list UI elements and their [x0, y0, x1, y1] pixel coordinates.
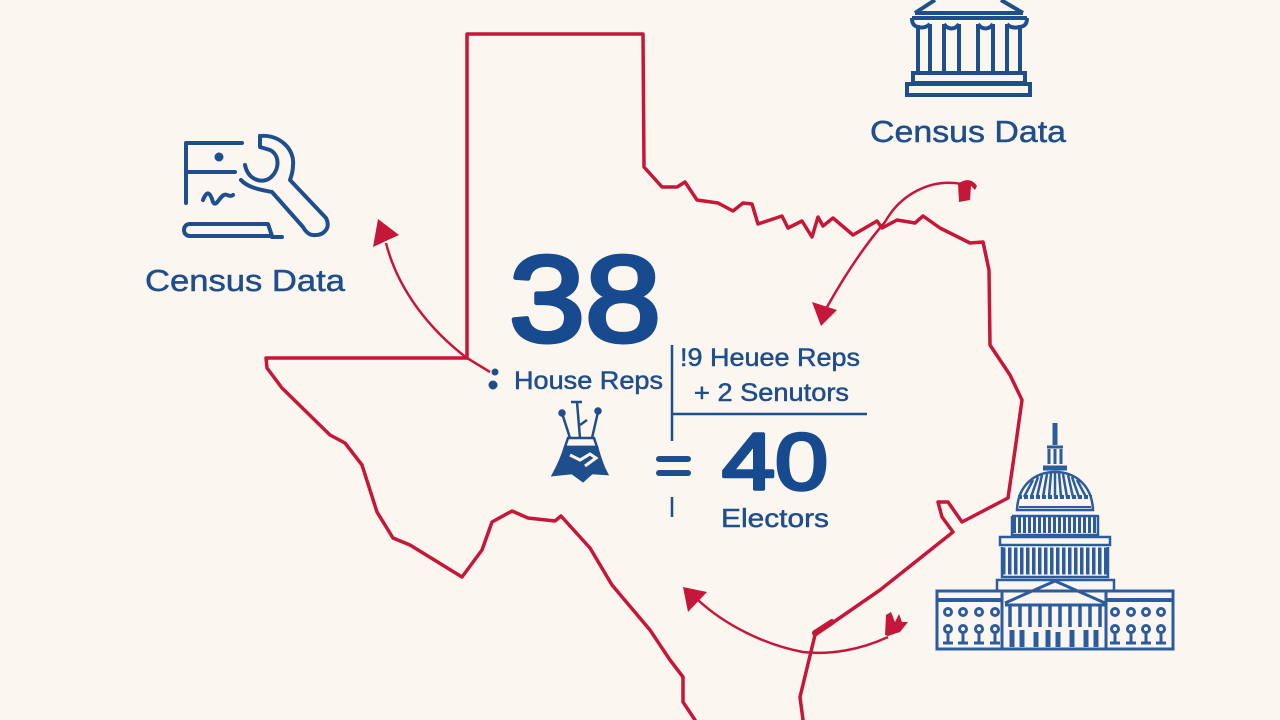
arrow: to census data left: [373, 219, 490, 372]
arrow: top right: [812, 180, 977, 326]
label: census data left: Census Data: [145, 263, 346, 298]
icon: capitol building: [937, 423, 1173, 649]
text: house reps left: House Reps: [514, 367, 663, 395]
text: house reps right: !9 Heuee Reps: [680, 344, 860, 372]
big number 40: 40: [722, 417, 828, 506]
icon: document and wrench: [184, 136, 328, 237]
equals sign: [656, 456, 691, 476]
text: electors: Electors: [721, 503, 829, 533]
big number 38: 38: [509, 231, 661, 367]
icon: government building: [907, 0, 1030, 95]
fraction divider lines: [672, 345, 867, 517]
arrow: bottom: [683, 587, 908, 653]
label: census data top right: Census Data: [870, 114, 1067, 149]
icon: emblem: [553, 402, 607, 481]
map: Texas outline: [266, 34, 1022, 720]
text: senators: + 2 Senutors: [694, 379, 849, 407]
